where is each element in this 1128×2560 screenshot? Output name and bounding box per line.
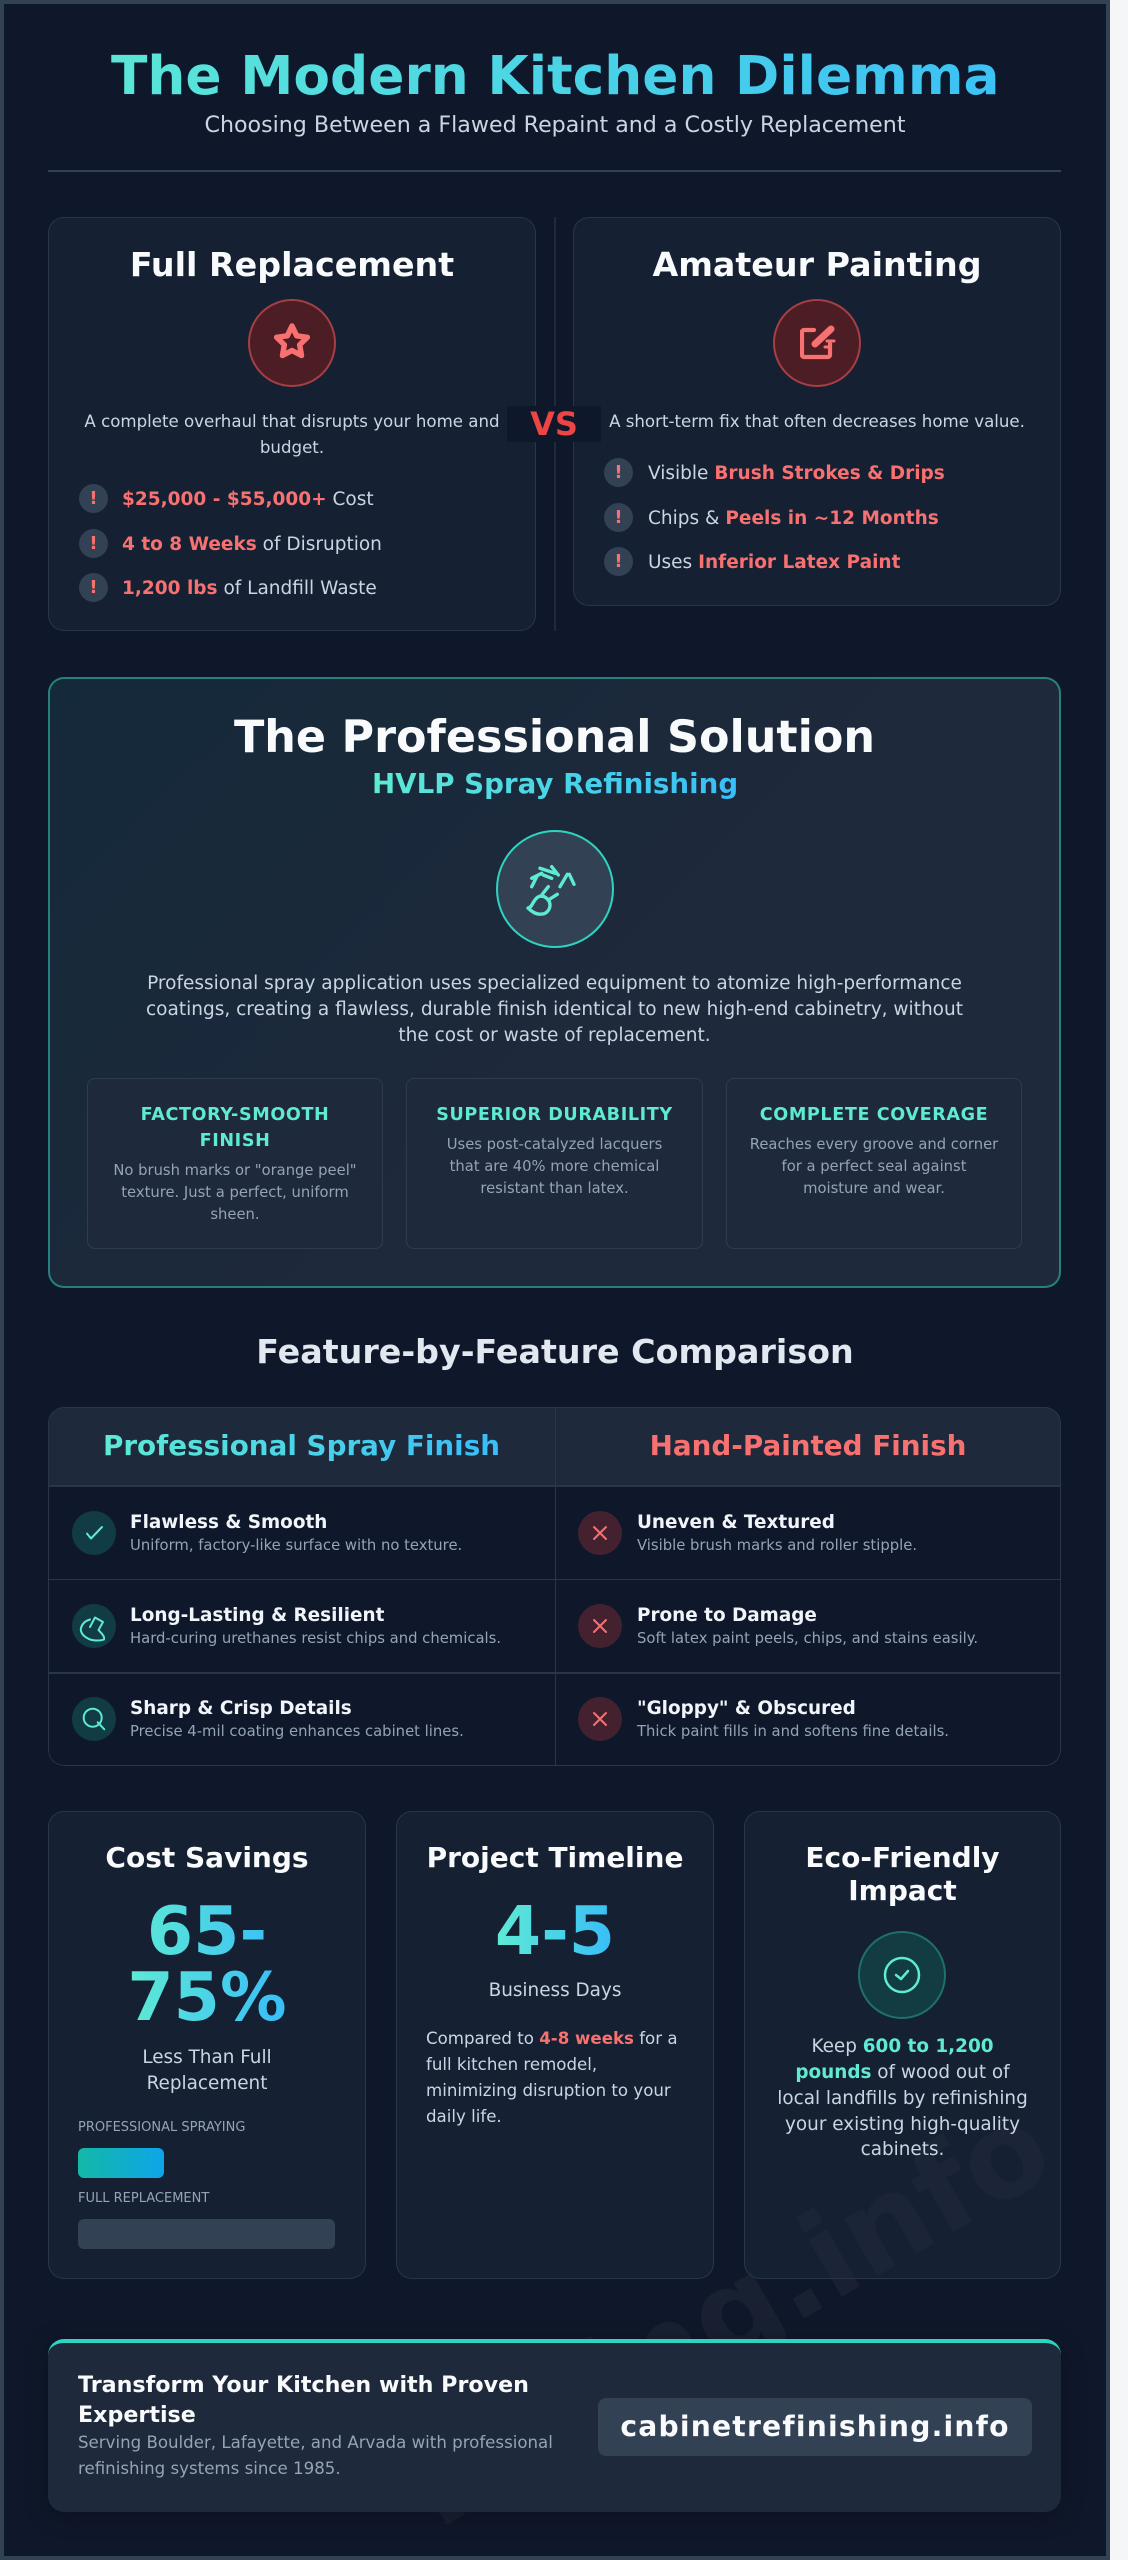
point: brush strokes: Visible Brush Strokes & Drips: [648, 463, 945, 484]
point: latex: Uses Inferior Latex Paint: [648, 552, 900, 573]
label: [142, 2047, 272, 2094]
subheading: hvlp: HVLP Spray Refinishing: [372, 767, 738, 800]
comparison table: [48, 1407, 1061, 1766]
text: Compared to 4-8 weeks for a: [426, 2029, 678, 2048]
row: long-lasting: Hard-curing urethanes resist chips and chemicals.: [130, 1630, 501, 1647]
big number: 65-75%: [127, 1892, 287, 2036]
panel: full replacement: [48, 217, 536, 631]
icon: pencil: [773, 299, 861, 387]
title: The Modern Kitchen Dilemma: [111, 44, 999, 107]
paragraph: the cost or waste of replacement.: [398, 1025, 711, 1046]
text: cabinets.: [861, 2139, 944, 2160]
stat: disruption: 4 to 8 Weeks of Disruption: [122, 534, 382, 555]
icon: magnifier: [72, 1697, 116, 1741]
row: damage: Soft latex paint peels, chips, and stains easily.: [637, 1630, 978, 1647]
heading: full replacement: Full Replacement: [130, 245, 454, 284]
bar label: professional: PROFESSIONAL SPRAYING: [78, 2120, 245, 2135]
feature: factory-smooth finish: FINISH: [200, 1130, 270, 1150]
feature: complete coverage: moisture and wear.: [803, 1180, 945, 1197]
website button: cabinetrefinishing.info: [620, 2410, 1010, 2443]
row: gloppy: Thick paint fills in and softens fine details.: [637, 1723, 949, 1740]
text: local landfills by refinishing: [777, 2088, 1028, 2109]
panel: professional solution: [48, 677, 1061, 1288]
column header: professional: Professional Spray Finish: [103, 1429, 500, 1462]
row: long-lasting: [130, 1605, 501, 1647]
panel: eco-friendly impact: [744, 1811, 1061, 2279]
row: uneven: Uneven & Textured: [637, 1512, 835, 1533]
heading: eco-friendly impact: Impact: [848, 1874, 957, 1907]
label: Business Days: [489, 1980, 621, 2001]
row: sharp: Sharp & Crisp Details: [130, 1698, 352, 1719]
label: Replacement: [147, 2073, 267, 2094]
text: minimizing disruption to your: [426, 2081, 671, 2100]
paragraph: coatings, creating a flawless, durable finish identical to new high-end cabinetry, without: [146, 999, 963, 1020]
description: A complete overhaul that disrupts your home and: [84, 412, 500, 431]
stat: cost: [79, 484, 374, 513]
row: damage: Prone to Damage: [637, 1605, 817, 1626]
heading: amateur painting: Amateur Painting: [652, 245, 982, 284]
text: full kitchen remodel,: [426, 2055, 597, 2074]
icon: shield: [72, 1604, 116, 1648]
column header: hand-painted: Hand-Painted Finish: [650, 1429, 966, 1462]
big number: 65-75%: 65-: [147, 1892, 267, 1970]
feature: superior durability: Uses post-catalyzed lacquers: [447, 1136, 662, 1153]
row: sharp: [130, 1698, 464, 1740]
point: peels: Chips & Peels in ~12 Months: [648, 508, 939, 529]
row: damage: [637, 1605, 978, 1647]
heading: project timeline: Project Timeline: [427, 1841, 683, 1874]
text: Keep 600 to 1,200: [811, 2036, 994, 2057]
big number: 65-75%: 75%: [127, 1958, 287, 2036]
cta heading: Transform Your Kitchen with Proven: [78, 2372, 529, 2398]
cta heading: [78, 2372, 529, 2428]
point: brush strokes: !: [614, 462, 623, 483]
text: [426, 2029, 678, 2126]
feature: factory-smooth finish: [87, 1078, 383, 1249]
paragraph: Professional spray application uses specialized equipment to atomize high-performance: [147, 973, 962, 994]
vs badge: [507, 406, 601, 442]
feature: superior durability: SUPERIOR DURABILITY: [436, 1104, 673, 1124]
heading: comparison: Feature-by-Feature Comparison: [256, 1332, 854, 1371]
panel: project timeline: [396, 1811, 714, 2279]
icon: star: [248, 299, 336, 387]
heading: professional solution: The Professional Solution: [234, 712, 875, 763]
row: flawless: [130, 1512, 462, 1554]
stat: cost: !: [89, 488, 98, 509]
point: latex: [604, 547, 900, 576]
row: flawless: Flawless & Smooth: [130, 1512, 327, 1533]
stat: disruption: [79, 529, 382, 558]
feature: factory-smooth finish: FACTORY-SMOOTH: [141, 1104, 329, 1124]
point: peels: !: [614, 507, 623, 528]
point: peels: [604, 503, 939, 532]
feature: superior durability: [406, 1078, 703, 1249]
icon: check circle: [858, 1931, 946, 2019]
feature: complete coverage: for a perfect seal against: [782, 1158, 966, 1175]
stat: disruption: !: [89, 533, 98, 554]
stat: waste: !: [89, 577, 98, 598]
description: A short-term fix that often decreases home value.: [609, 412, 1025, 431]
stat: cost: $25,000 - $55,000+ Cost: [122, 489, 374, 510]
cta text: Serving Boulder, Lafayette, and Arvada with professional: [78, 2433, 553, 2452]
point: brush strokes: [604, 458, 945, 487]
text: [777, 2036, 1028, 2160]
row: sharp: Precise 4-mil coating enhances cabinet lines.: [130, 1723, 464, 1740]
subtitle: Choosing Between a Flawed Repaint and a Costly Replacement: [204, 112, 906, 138]
bar: professional: [78, 2148, 164, 2178]
icon: cross: [578, 1511, 622, 1555]
row: long-lasting: Long-Lasting & Resilient: [130, 1605, 384, 1626]
point: latex: !: [614, 551, 623, 572]
feature: complete coverage: COMPLETE COVERAGE: [760, 1104, 988, 1124]
heading: eco-friendly impact: Eco-Friendly: [805, 1841, 1000, 1874]
feature: factory-smooth finish: sheen.: [210, 1206, 260, 1222]
description: budget.: [260, 438, 324, 457]
big number: 4-5: 4-5: [495, 1892, 615, 1970]
heading: eco-friendly impact: [805, 1841, 1000, 1907]
feature: superior durability: resistant than latex.: [480, 1180, 629, 1197]
feature: superior durability: that are 40% more chemical: [450, 1158, 659, 1175]
feature: complete coverage: [726, 1078, 1022, 1249]
bar label: replacement: FULL REPLACEMENT: [78, 2191, 209, 2206]
icon: cross: [578, 1604, 622, 1648]
description: [84, 412, 500, 457]
text: your existing high-quality: [785, 2114, 1020, 2135]
row: uneven: Visible brush marks and roller stipple.: [637, 1537, 917, 1554]
row: gloppy: "Gloppy" & Obscured: [637, 1698, 856, 1719]
heading: cost savings: Cost Savings: [105, 1841, 309, 1874]
feature: factory-smooth finish: No brush marks or "orange peel": [113, 1162, 357, 1178]
text: daily life.: [426, 2107, 502, 2126]
stat: waste: 1,200 lbs of Landfill Waste: [122, 578, 377, 599]
paragraph: [146, 973, 963, 1046]
cta text: [78, 2433, 553, 2478]
feature: complete coverage: Reaches every groove and corner: [750, 1136, 998, 1153]
icon: spray: [496, 830, 614, 948]
stat: waste: [79, 573, 377, 602]
label: Less Than Full: [142, 2047, 272, 2068]
watermark: ishing.info: [383, 2076, 1074, 2555]
row: flawless: Uniform, factory-like surface with no texture.: [130, 1537, 462, 1554]
feature: factory-smooth finish: texture. Just a perfect, uniform: [121, 1184, 349, 1200]
panel: cost savings: [48, 1811, 366, 2279]
icon: cross: [578, 1697, 622, 1741]
website button: [598, 2398, 1032, 2456]
text: pounds of wood out of: [795, 2062, 1010, 2083]
row: uneven: [637, 1512, 917, 1554]
cta heading: Expertise: [78, 2402, 196, 2428]
row: gloppy: [636, 1698, 949, 1740]
call to action: [48, 2339, 1061, 2512]
cta text: refinishing systems since 1985.: [78, 2459, 341, 2478]
panel: amateur painting: [573, 217, 1061, 606]
bar: replacement: [78, 2219, 335, 2249]
icon: check: [72, 1511, 116, 1555]
vs badge: VS: [530, 405, 578, 443]
